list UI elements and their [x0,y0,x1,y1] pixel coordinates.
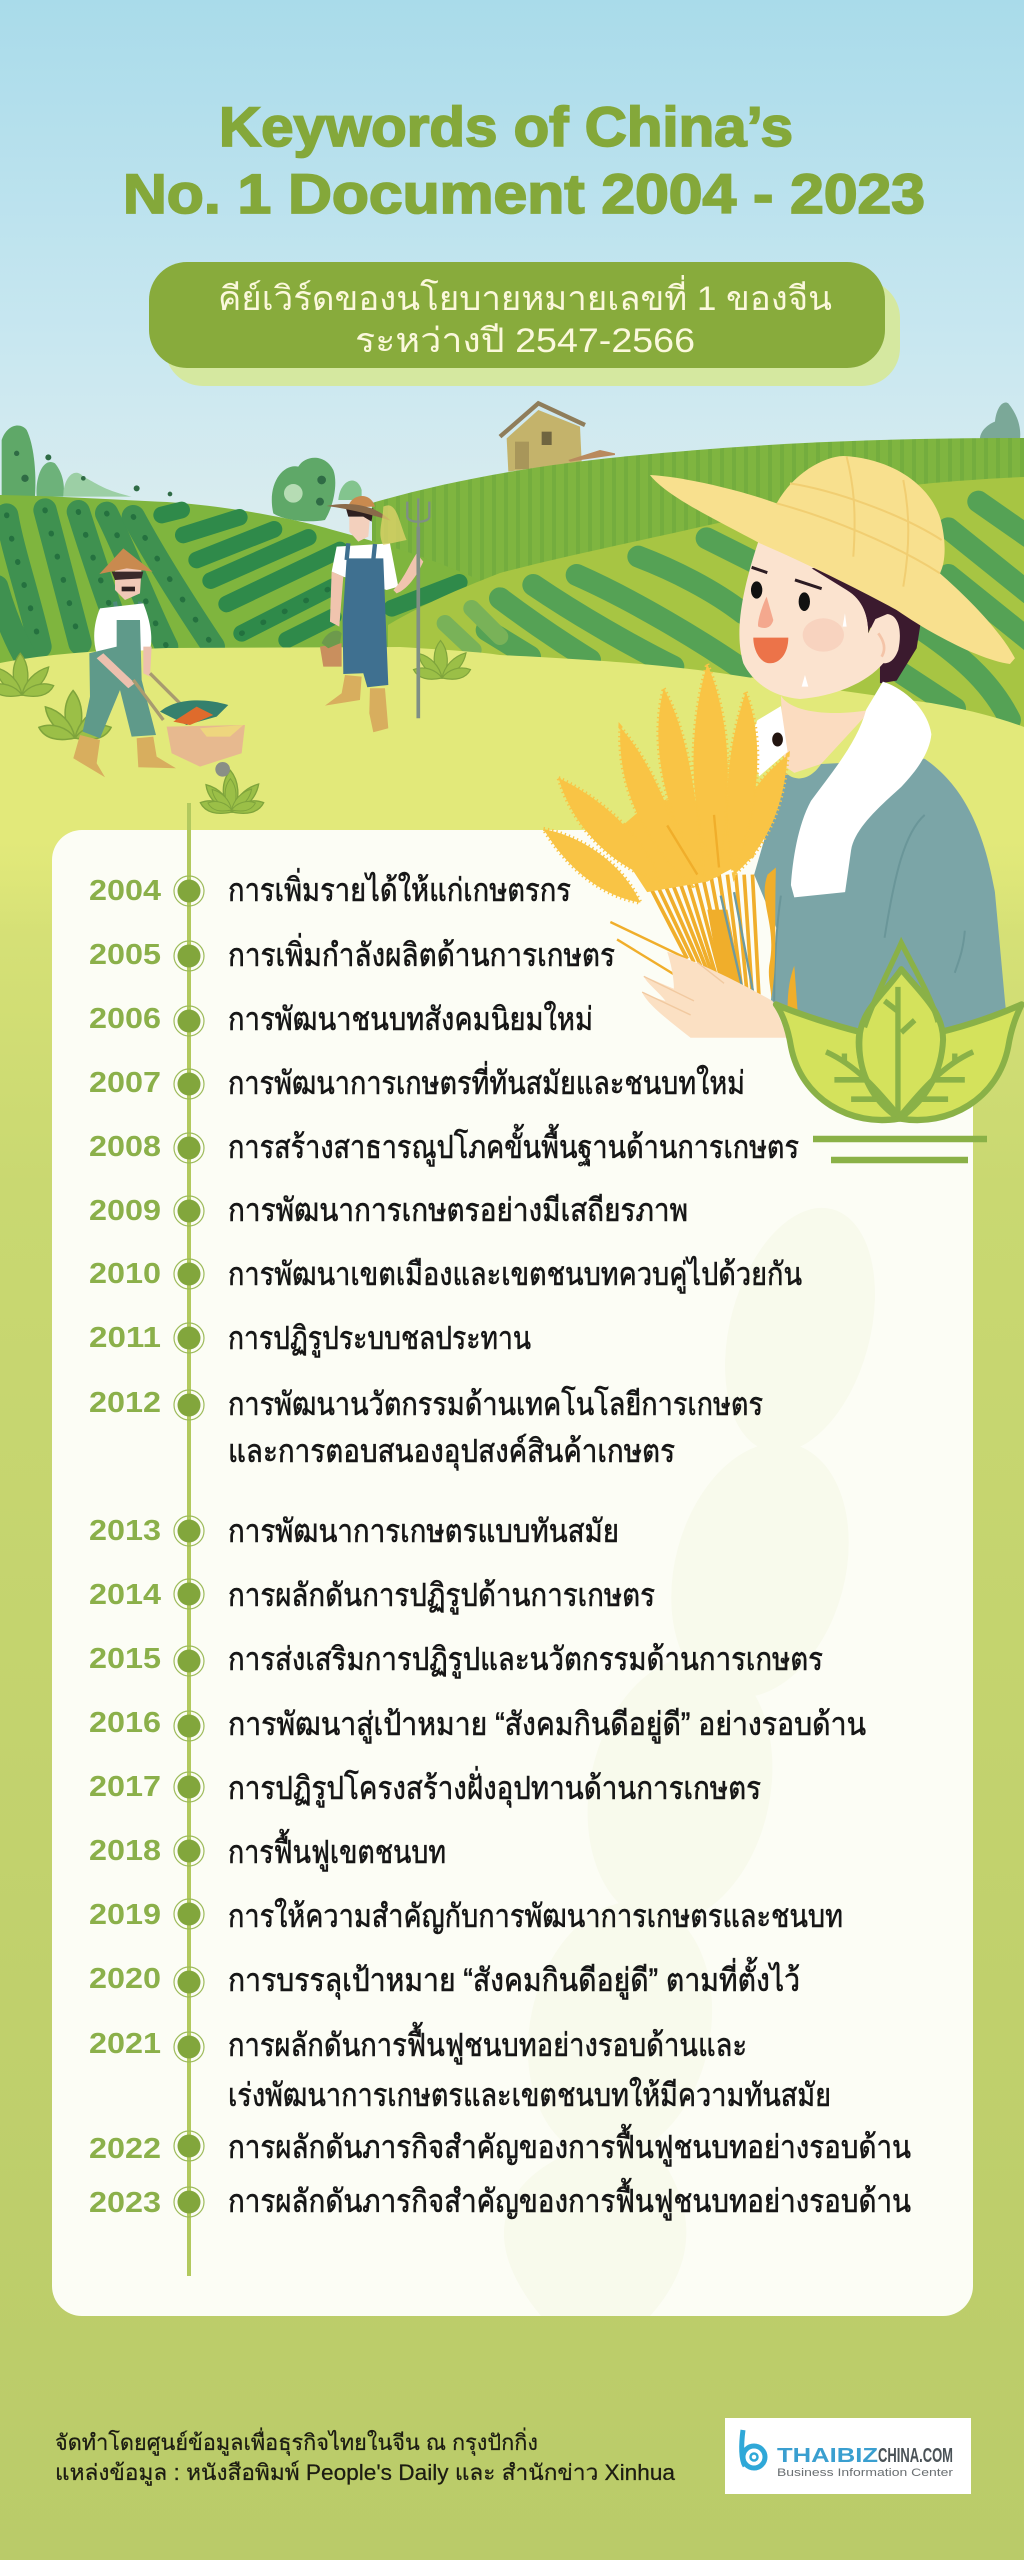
footer credits: แหล่งข้อมูล : หนังสือพิมพ์ People's Daily และ สำนักข่าว Xinhua [55,2460,676,2486]
row 2008 [89,1124,799,1167]
illustration: left hill with crop rows [0,495,520,680]
row 2015: 2015 [89,1643,161,1675]
row 2007 [89,1061,745,1101]
row 2022: การผลักดันภารกิจสำคัญของการฟื้นฟูชนบทอย่างรอบด้าน [228,2124,911,2167]
subtitle pill: ระหว่างปี 2547-2566 [355,322,695,360]
row 2017: การปฏิรูปโครงสร้างฝั่งอุปทานด้านการเกษตร [228,1766,761,1808]
row 2016: 2016 [89,1707,161,1739]
title: Keywords of China’s [219,95,793,158]
row 2014: 2014 [89,1579,161,1611]
wheat bundle [543,664,798,1011]
row 2010: 2010 [89,1258,161,1290]
row 2021: การผลักดันการฟื้นฟูชนบทอย่างรอบด้านและ [228,2022,747,2065]
card watermark: wheat leaves [504,1191,900,2316]
row 2015: การส่งเสริมการปฏิรูปและนวัตกรรมด้านการเกษตร [228,1641,823,1679]
illustration: ground plants [0,640,471,813]
footer credits: จัดทำโดยศูนย์ข้อมูลเพื่อธุรกิจไทยในจีน ณ กรุงปักกิ่ง [55,2427,538,2456]
illustration: farmer with pitchfork [320,496,429,732]
row 2021: 2021 [89,2028,161,2060]
row 2018: การฟื้นฟูเขตชนบท [228,1829,446,1872]
row 2009: การพัฒนาการเกษตรอย่างมีเสถียรภาพ [228,1192,688,1228]
subtitle pill [149,262,900,386]
row 2010: การพัฒนาเขตเมืองและเขตชนบทควบคู่ไปด้วยกัน [228,1256,802,1294]
row 2005: 2005 [89,939,161,971]
row 2013 [89,1513,619,1549]
row 2014 [89,1577,655,1615]
timeline rows [89,868,911,2221]
row 2011 [89,1320,531,1358]
face [739,542,900,699]
row 2012: 2012 [89,1387,161,1419]
panel: timeline card [52,830,973,2316]
shirt [754,696,1007,1036]
background: sky [0,0,1024,680]
illustration: middle hill with crop rows [388,477,1024,760]
row 2005: การเพิ่มกำลังผลิตด้านการเกษตร [228,933,615,973]
subtitle pill: คีย์เวิร์ดของนโยบายหมายเลขที่ 1 ของจีน [218,275,832,318]
row 2008: การสร้างสาธารณูปโภคขั้นพื้นฐานด้านการเกษตร [228,1124,799,1167]
row 2012 [89,1386,763,1471]
row 2017: 2017 [89,1771,161,1803]
row 2021: เร่งพัฒนาการเกษตรและเขตชนบทให้มีความทันสมัย [228,2077,831,2113]
logo: thaibizchina: CHINA.COM [878,2445,953,2467]
row 2012: และการตอบสนองอุปสงค์สินค้าเกษตร [228,1433,675,1471]
row 2014: การผลักดันการปฏิรูปด้านการเกษตร [228,1577,655,1615]
row 2022 [89,2124,911,2167]
row 2021 [89,2022,831,2113]
towel [753,682,931,897]
row 2004 [89,868,571,908]
row 2022: 2022 [89,2133,161,2165]
timeline axis [187,803,191,2276]
row 2023: การผลักดันภารกิจสำคัญของการฟื้นฟูชนบทอย่างรอบด้าน [228,2178,911,2221]
row 2005 [89,933,615,973]
logo emblem: three leaves [776,943,1022,1120]
illustration: foreground field [0,647,1024,840]
logo icon [742,2430,765,2468]
row 2004: 2004 [89,875,161,907]
title [123,95,925,225]
row 2007: 2007 [89,1067,161,1099]
row 2020: 2020 [89,1963,161,1995]
illustration: main farmer with straw hat [543,456,1015,1038]
row 2007: การพัฒนาการเกษตรที่ทันสมัยและชนบทใหม่ [228,1061,745,1101]
logo: thaibizchina: THAIBIZ [777,2445,878,2467]
row 2011: 2011 [89,1322,161,1354]
footer credits [55,2427,676,2486]
row 2019: การให้ความสำคัญกับการพัฒนาการเกษตรและชนบท [228,1898,843,1934]
row 2009 [89,1192,688,1228]
row 2013: การพัฒนาการเกษตรแบบทันสมัย [228,1513,619,1549]
row 2015 [89,1641,823,1679]
background: lower green gradient [0,650,1024,2560]
hair [812,568,921,683]
row 2017 [89,1766,761,1808]
illustration: farmhouse [500,403,615,472]
row 2010 [89,1256,802,1294]
emblem underlines [813,1139,987,1160]
row 2006: 2006 [89,1003,161,1035]
hat [650,456,1015,664]
illustration: right hill [372,438,1024,760]
illustration: foreground field fade [0,840,1024,930]
row 2020 [89,1957,800,2000]
title: No. 1 Document 2004 - 2023 [123,162,925,225]
row 2023: 2023 [89,2187,161,2219]
row 2011: การปฏิรูประบบชลประทาน [228,1320,531,1358]
illustration: farmer with wheelbarrow [73,548,255,811]
row 2006 [89,1001,593,1037]
row 2023 [89,2178,911,2221]
row 2018: 2018 [89,1835,161,1867]
hand [642,952,788,1038]
row 2019: 2019 [89,1899,161,1931]
row 2012: การพัฒนานวัตกรรมด้านเทคโนโลยีการเกษตร [228,1386,763,1422]
row 2004: การเพิ่มรายได้ให้แก่เกษตรกร [228,868,571,908]
row 2008: 2008 [89,1131,161,1163]
logo: thaibizchina [725,2418,971,2494]
logo: thaibizchina: Business Information Center [777,2467,953,2479]
row 2020: การบรรลุเป้าหมาย “สังคมกินดีอยู่ดี” ตามที่ตั้งไว้ [228,1957,800,2000]
row 2006: การพัฒนาชนบทสังคมนิยมใหม่ [228,1001,593,1037]
row 2009: 2009 [89,1195,161,1227]
illustration: trees [2,402,1020,521]
row 2013: 2013 [89,1515,161,1547]
row 2016: การพัฒนาสู่เป้าหมาย “สังคมกินดีอยู่ดี” อย่างรอบด้าน [228,1706,866,1744]
row 2018 [89,1829,446,1872]
